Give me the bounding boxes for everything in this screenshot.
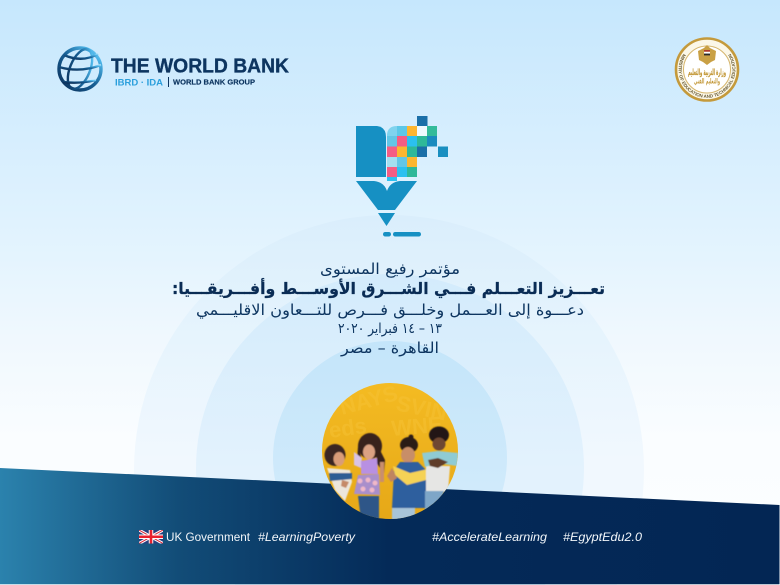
- icon: UK flag: [139, 530, 163, 544]
- conference logo: book pencil: [356, 116, 448, 236]
- Ministry of Education seal: والتعليم الفني: [694, 76, 720, 86]
- wall lettering: SVIN: [394, 390, 449, 426]
- hashtag: AccelerateLearning: #AccelerateLearning: [432, 530, 547, 544]
- World Bank logo: [59, 46, 290, 92]
- child 1: [324, 444, 352, 501]
- wall lettering: NAYS: [337, 380, 400, 420]
- Ministry of Education seal: وزارة التربية والتعليم: [688, 68, 726, 78]
- line: date: ١٣ – ١٤ فبراير ٢٠٢٠: [338, 321, 442, 337]
- icon: eagle: [698, 45, 716, 65]
- photo: children reading: [322, 380, 458, 520]
- pencil tip: [378, 213, 395, 226]
- World Bank wordmark: THE WORLD BANK: [111, 56, 290, 78]
- icon: globe: [59, 46, 101, 92]
- line: subtitle: دعـــوة إلى العـــمل وخلـــق فـــرص للتـــعاون الاقليـــمي: [196, 301, 584, 320]
- line: main title: تعـــزيز التعـــلم فـــي الشـــرق الأوســـط وأفـــريقـــيا:: [172, 278, 605, 299]
- line: location: القاهرة – مصر: [340, 339, 439, 357]
- Arabic title block: [172, 260, 605, 357]
- seal ring text: MINISTRY OF EDUCATION AND TECHNICAL EDUCATION: [678, 54, 736, 98]
- logo pills: [383, 232, 421, 236]
- hashtag: EgyptEdu2.0: #EgyptEdu2.0: [563, 530, 642, 544]
- child 3: [387, 434, 428, 520]
- IBRD IDA label: IBRD · IDA: [115, 78, 163, 88]
- Ministry of Education seal: [674, 37, 740, 102]
- line: conference type: مؤتمر رفيع المستوى: [320, 260, 460, 278]
- pixel grid: [387, 116, 448, 181]
- child 2: [354, 433, 385, 519]
- hashtag: LearningPoverty: #LearningPoverty: [258, 530, 356, 544]
- left book page: [356, 126, 386, 177]
- pencil body: [356, 181, 417, 210]
- World Bank Group label: WORLD BANK GROUP: [173, 78, 255, 86]
- wall lettering: eds: [327, 413, 368, 443]
- footer credits: [139, 530, 642, 544]
- wall lettering: WNE: [390, 412, 444, 441]
- child 4: [422, 426, 458, 510]
- concentric background circles: [134, 215, 644, 585]
- wall lettering: [330, 386, 446, 437]
- UK Government label: UK Government: [166, 530, 251, 544]
- dark blue bottom band: [0, 468, 780, 584]
